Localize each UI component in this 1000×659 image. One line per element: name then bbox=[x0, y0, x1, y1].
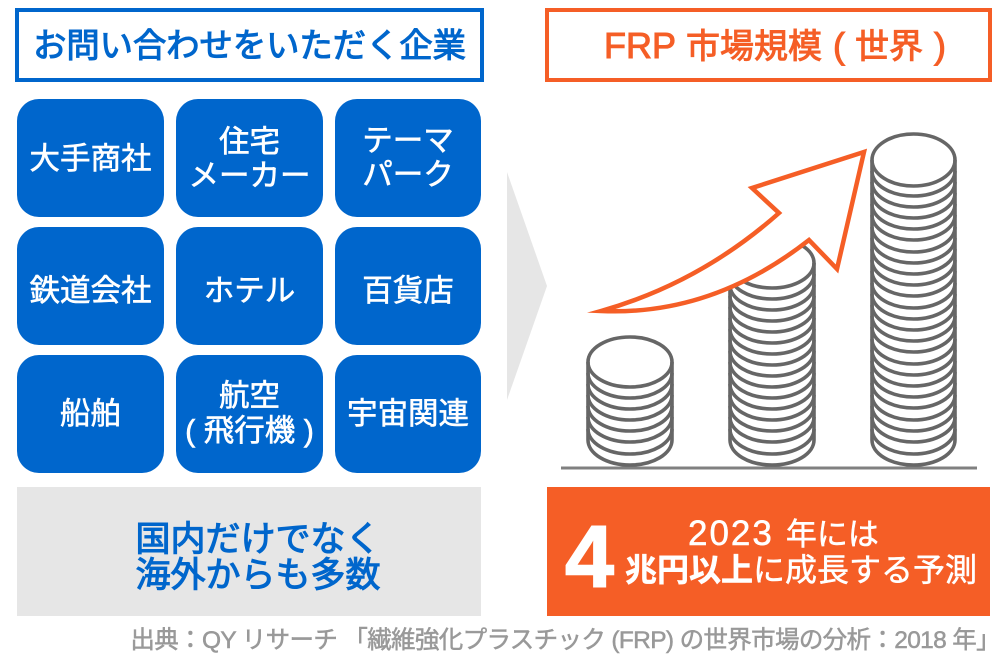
callout: domestic and overseas: 国内だけでなく bbox=[135, 520, 380, 559]
tile: housing makers: メーカー bbox=[188, 159, 310, 193]
tile: department stores bbox=[335, 227, 481, 345]
forecast line 1: 2023 年には bbox=[688, 514, 879, 553]
source note: 出典：QY リサーチ 「繊維強化プラスチック (FRP) の世界市場の分析：2018 年」 bbox=[130, 627, 1000, 654]
tile: housing makers bbox=[176, 99, 323, 217]
tile: trading companies bbox=[17, 99, 164, 217]
tile: ships: 船舶 bbox=[60, 397, 121, 431]
heading: companies: お問い合わせをいただく企業 bbox=[33, 28, 466, 65]
tile: railway companies: 鉄道会社 bbox=[30, 274, 152, 308]
heading: companies bbox=[15, 8, 484, 82]
tile: aviation: 航空 bbox=[219, 379, 280, 413]
callout: forecast 4 trillion yen bbox=[547, 487, 990, 616]
ground line bbox=[561, 466, 977, 470]
tile: aviation bbox=[176, 355, 323, 473]
arrow: rising growth bbox=[601, 152, 864, 311]
coin stack: medium bbox=[730, 238, 814, 465]
tile: hotels: ホテル bbox=[204, 274, 295, 308]
forecast line 2: 兆円以上に成長する予測 bbox=[625, 552, 977, 588]
tile: trading companies: 大手商社 bbox=[30, 142, 152, 176]
tile: railway companies bbox=[17, 227, 164, 345]
tile: space related: 宇宙関連 bbox=[347, 397, 469, 431]
coin stack: large bbox=[872, 134, 955, 465]
coin stack: small bbox=[588, 337, 672, 465]
tile: theme parks: パーク bbox=[362, 158, 454, 192]
tile: ships bbox=[17, 355, 164, 473]
heading: FRP market size: FRP 市場規模 ( 世界 ) bbox=[604, 25, 946, 66]
callout: domestic and overseas: 海外からも多数 bbox=[135, 556, 380, 595]
heading: FRP market size bbox=[545, 8, 992, 82]
tile: theme parks: テーマ bbox=[362, 124, 454, 158]
tile: hotels bbox=[176, 227, 323, 345]
tile: department stores: 百貨店 bbox=[362, 274, 454, 308]
tile: theme parks bbox=[335, 99, 481, 217]
tile: space related bbox=[335, 355, 481, 473]
big number 4: 4 bbox=[565, 507, 614, 606]
callout: domestic and overseas bbox=[17, 487, 481, 616]
tile: aviation: ( 飛行機 ) bbox=[185, 414, 314, 448]
tile: housing makers: 住宅 bbox=[219, 125, 280, 159]
